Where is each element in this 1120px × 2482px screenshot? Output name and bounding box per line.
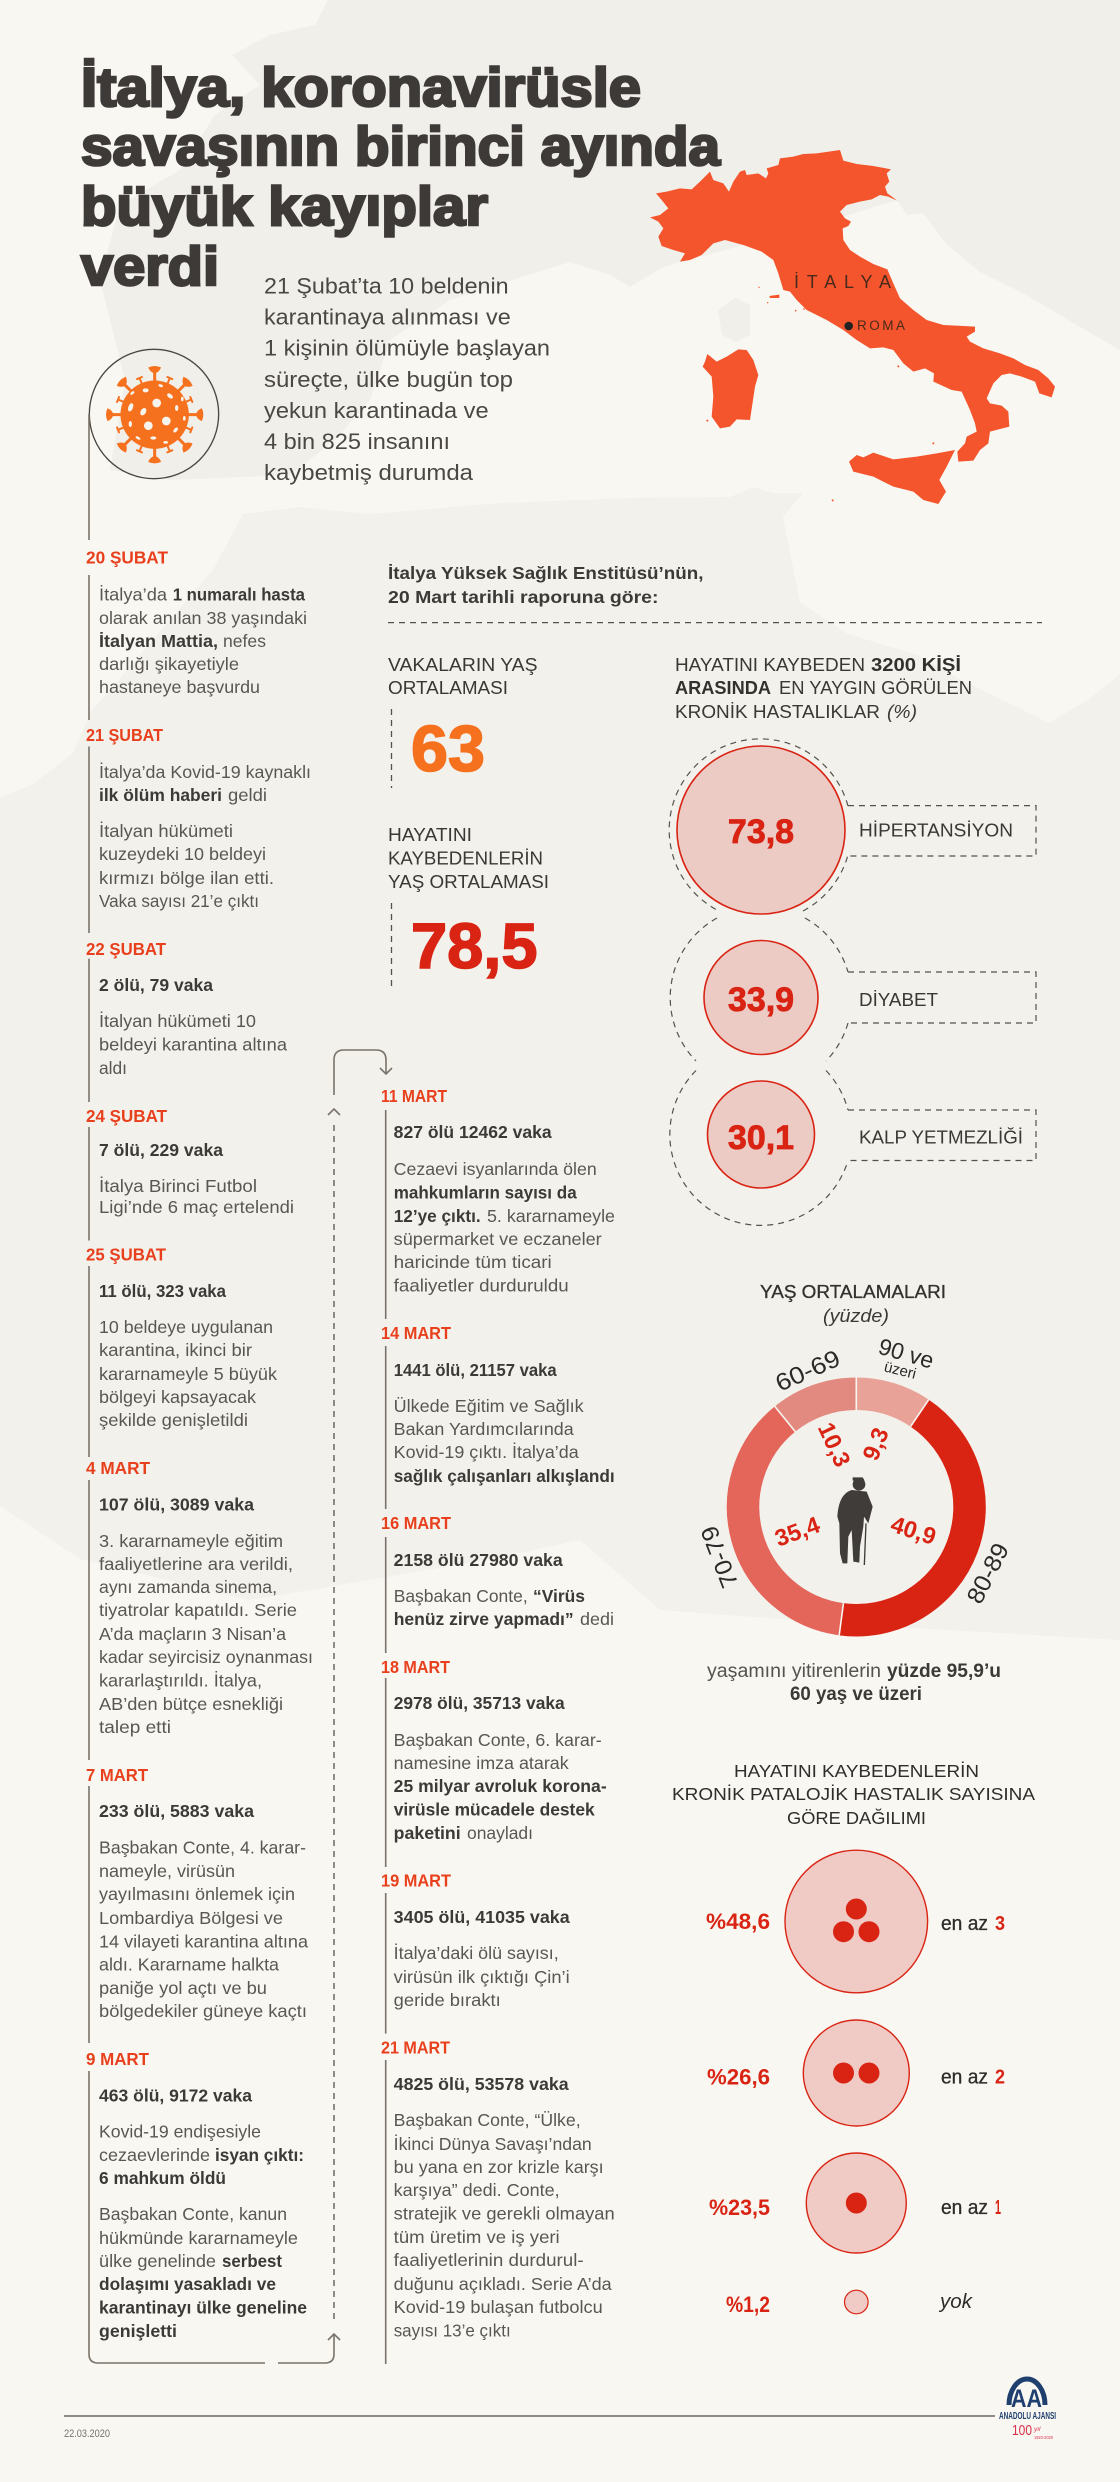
entry: 21 Mart <box>381 2038 615 2364</box>
row: at least 3: en az <box>941 1913 988 1935</box>
stat: death age average: HAYATINI <box>388 825 472 845</box>
donut labels: 40,9 <box>888 1511 939 1550</box>
entry: 9 Mart: genişletti <box>99 2321 177 2341</box>
entry: 25 Şubat: bölgeyi kapsayacak <box>99 1387 256 1407</box>
entry: 14 Mart: Kovid-19 çıktı. İtalya’da <box>394 1442 579 1462</box>
dot: Roma <box>844 322 853 330</box>
entry: 19 Mart: geride bıraktı <box>394 1990 501 2010</box>
entry: 20 Şubat <box>86 548 307 720</box>
entry: 14 Mart: sağlık çalışanları alkışlandı <box>394 1466 615 1486</box>
entry: 20 Şubat: İtalyan Mattia, <box>99 631 218 651</box>
intro text: kaybetmiş durumda <box>264 460 474 485</box>
row: at least 1: %23,5 <box>709 2195 770 2220</box>
intro text: 4 bin 825 insanını <box>264 429 450 454</box>
entry: 11 Mart: haricinde tüm ticari <box>394 1252 552 1272</box>
heading: chronic diseases: ARASINDA <box>675 678 771 698</box>
entry: 19 Mart: 3405 ölü, 41035 vaka <box>394 1907 570 1927</box>
entry: 21 Şubat: 21 ŞUBAT <box>86 725 163 745</box>
row: at least 3: %48,6 <box>706 1909 770 1934</box>
heading: chronic diseases: EN YAYGIN GÖRÜLEN <box>779 678 972 698</box>
row: at least 1 <box>709 2153 1001 2253</box>
entry: 9 Mart <box>86 2049 334 2363</box>
entry: 9 Mart: cezaevlerinde <box>99 2145 210 2165</box>
row: at least 1: 1 <box>995 2197 1001 2219</box>
heading: age averages: (yüzde) <box>823 1306 889 1326</box>
entry: 9 Mart: karantinayı ülke geneline <box>99 2298 307 2318</box>
footer rule <box>64 2415 995 2417</box>
row: at least 3 <box>706 1850 1005 1993</box>
stat: case age average: 63 <box>411 712 485 785</box>
heading: age averages: YAŞ ORTALAMALARI <box>760 1282 946 1302</box>
stat: death age average: KAYBEDENLERİN <box>388 848 543 868</box>
row: none: %1,2 <box>726 2292 770 2317</box>
date: 22.03.2020 <box>64 2428 110 2440</box>
entry: 14 Mart: Bakan Yardımcılarında <box>394 1419 574 1439</box>
bubble: diyabet <box>704 940 938 1054</box>
entry: 9 Mart: serbest <box>222 2251 282 2271</box>
entry: 19 Mart <box>381 1871 570 2034</box>
entry: 9 Mart: ülke genelinde <box>99 2251 216 2271</box>
entry: 9 Mart: hükmünde kararnameyle <box>99 2228 298 2248</box>
entry: 7 Mart: 7 MART <box>86 1765 148 1785</box>
entry: 4 Mart: aynı zamanda sinema, <box>99 1577 277 1597</box>
entry: 20 Şubat: 20 ŞUBAT <box>86 548 168 568</box>
bubble: hipertansiyon <box>677 746 1013 914</box>
entry: 21 Mart: duğunu açıkladı. Serie A’da <box>394 2274 612 2294</box>
heading: chronic diseases: HAYATINI KAYBEDEN <box>675 655 865 675</box>
entry: 25 Şubat: şekilde genişletildi <box>99 1410 248 1430</box>
entry: 11 Mart: Cezaevi isyanlarında ölen <box>394 1159 597 1179</box>
stat: death age average: YAŞ ORTALAMASI <box>388 872 549 892</box>
entry: 11 Mart: 11 MART <box>381 1086 447 1106</box>
entry: 24 Şubat: Ligi’nde 6 maç ertelendi <box>99 1197 294 1217</box>
entry: 9 Mart: dolaşımı yasakladı ve <box>99 2274 276 2294</box>
row: at least 2 <box>707 2020 1005 2126</box>
entry: 22 Şubat: beldeyi karantina altına <box>99 1034 287 1054</box>
donut labels: 90 ve <box>876 1333 937 1374</box>
entry: 21 Şubat: İtalyan hükümeti <box>99 821 233 841</box>
logo: Anadolu Ajansı: AA <box>1011 2385 1042 2413</box>
entry: 7 Mart: 14 vilayeti karantina altına <box>99 1932 308 1952</box>
entry: 4 Mart: 3. kararnameyle eğitim <box>99 1531 283 1551</box>
entry: 21 Şubat: İtalya’da Kovid-19 kaynaklı <box>99 762 311 782</box>
heading: chronic diseases: 3200 KİŞİ <box>871 655 961 675</box>
entry: 24 Şubat: İtalya Birinci Futbol <box>99 1176 257 1196</box>
donut labels <box>696 1333 1015 1608</box>
entry: 18 Mart: 25 milyar avroluk korona- <box>394 1776 607 1796</box>
icon: coronavirus in circle <box>89 349 219 479</box>
intro text: yekun karantinada ve <box>264 398 489 423</box>
bubble: kalp yetmezliği: 30,1 <box>728 1119 794 1157</box>
entry: 18 Mart: Başbakan Conte, 6. karar- <box>394 1730 602 1750</box>
heading: chronic pathology <box>672 1761 1035 1828</box>
entry: 20 Şubat: nefes <box>223 631 266 651</box>
entry: 16 Mart: 2158 ölü 27980 vaka <box>394 1550 563 1570</box>
map: Italy <box>650 150 1055 504</box>
entry: 22 Şubat <box>86 939 287 1102</box>
entry: 14 Mart <box>381 1323 615 1509</box>
bubble: diyabet: DİYABET <box>859 990 938 1010</box>
entry: 7 Mart: yayılmasını önlemek için <box>99 1884 295 1904</box>
entry: 9 Mart: 463 ölü, 9172 vaka <box>99 2086 252 2106</box>
entry: 4 Mart: faaliyetlerine ara verildi, <box>99 1554 293 1574</box>
entry: 21 Şubat <box>86 725 311 933</box>
intro text: 21 Şubat’ta 10 beldenin <box>264 274 509 299</box>
title: İtalya, koronavirüsle <box>81 56 641 118</box>
entry: 21 Mart: bu yana en zor krizle karşı <box>394 2157 604 2177</box>
entry: 7 Mart: 233 ölü, 5883 vaka <box>99 1801 254 1821</box>
entry: 19 Mart: İtalya’daki ölü sayısı, <box>394 1943 559 1963</box>
intro text: süreçte, ülke bugün top <box>264 367 513 392</box>
bubble: diyabet: 33,9 <box>728 981 794 1019</box>
entry: 16 Mart: dedi <box>580 1609 614 1629</box>
entry: 21 Şubat: kuzeydeki 10 beldeyi <box>99 844 266 864</box>
heading: chronic pathology: KRONİK PATALOJİK HASTALIK SAYISINA <box>672 1784 1035 1804</box>
heading: chronic pathology: GÖRE DAĞILIMI <box>787 1807 926 1828</box>
entry: 4 Mart: 107 ölü, 3089 vaka <box>99 1495 254 1515</box>
entry: 21 Mart: faaliyetlerinin durdurul- <box>394 2250 584 2270</box>
title: büyük kayıplar <box>81 175 488 237</box>
label: İtalya: İTALYA <box>794 272 891 292</box>
heading: chronic pathology: HAYATINI KAYBEDENLERİN <box>734 1761 979 1781</box>
entry: 20 Şubat: hastaneye başvurdu <box>99 677 260 697</box>
entry: 21 Mart: İkinci Dünya Savaşı’ndan <box>394 2134 592 2154</box>
donut labels: 35,4 <box>771 1511 823 1552</box>
entry: 18 Mart: virüsle mücadele destek <box>394 1800 595 1820</box>
panel: chronic diseases <box>669 655 1036 1225</box>
entry: 11 Mart: süpermarket ve eczaneler <box>394 1229 602 1249</box>
bubble: kalp yetmezliği <box>708 1081 1023 1188</box>
entry: 9 Mart: 9 MART <box>86 2049 149 2069</box>
heading: chronic diseases: (%) <box>887 702 917 722</box>
heading: chronic diseases <box>675 655 972 722</box>
entry: 25 Şubat: kararnameyle 5 büyük <box>99 1364 277 1384</box>
row: at least 2: %26,6 <box>707 2064 770 2090</box>
entry: 22 Şubat: 2 ölü, 79 vaka <box>99 975 213 995</box>
stat: case age average <box>388 655 538 788</box>
donut labels: 70-79 <box>696 1522 744 1591</box>
entry: 7 Mart: paniğe yol açtı ve bu <box>99 1978 267 1998</box>
heading: chronic diseases: KRONİK HASTALIKLAR <box>675 702 880 722</box>
entry: 20 Şubat: 1 numaralı hasta <box>173 584 305 604</box>
entry: 21 Şubat: geldi <box>228 785 267 805</box>
entry: 24 Şubat: 24 ŞUBAT <box>86 1106 167 1126</box>
entry: 24 Şubat: 7 ölü, 229 vaka <box>99 1140 223 1160</box>
donut labels: 80-89 <box>962 1539 1015 1608</box>
entry: 21 Mart: sayısı 13’e çıktı <box>394 2320 511 2340</box>
entry: 21 Mart: Başbakan Conte, “Ülke, <box>394 2110 581 2130</box>
entry: 4 Mart: talep etti <box>99 1717 171 1737</box>
entry: 4 Mart: kadar seyircisiz oynanması <box>99 1647 313 1667</box>
entry: 16 Mart: Başbakan Conte, <box>394 1586 528 1606</box>
donut labels: üzeri <box>882 1358 918 1383</box>
entry: 4 Mart: 4 MART <box>86 1458 150 1478</box>
entry: 18 Mart: onayladı <box>467 1823 533 1843</box>
entry: 20 Şubat: darlığı şikayetiyle <box>99 654 239 674</box>
donut labels: 10,3 <box>813 1418 856 1471</box>
entry: 16 Mart: “Virüs <box>533 1586 585 1606</box>
entry: 25 Şubat: karantina, ikinci bir <box>99 1340 252 1360</box>
entry: 21 Mart: Kovid-19 bulaşan futbolcu <box>394 2297 603 2317</box>
donut caption <box>707 1661 1001 1705</box>
panel: timeline column 2 <box>381 1086 615 2364</box>
entry: 7 Mart <box>86 1765 308 2043</box>
logo: Anadolu Ajansı <box>999 2379 1056 2440</box>
entry: 25 Şubat: 25 ŞUBAT <box>86 1245 166 1265</box>
entry: 19 Mart: virüsün ilk çıktığı Çin’i <box>394 1967 570 1987</box>
intro text: 1 kişinin ölümüyle başlayan <box>264 336 550 361</box>
entry: 21 Şubat: ilk ölüm haberi <box>99 785 222 805</box>
entry: 4 Mart: A’da maçların 3 Nisan’a <box>99 1624 286 1644</box>
title: verdi <box>81 235 219 297</box>
donut chart <box>743 1377 970 1635</box>
row: at least 2: en az <box>941 2067 988 2089</box>
donut caption: yaşamını yitirenlerin <box>707 1661 881 1682</box>
entry: 21 Mart: karşıya” dedi. Conte, <box>394 2180 560 2200</box>
entry: 25 Şubat: 10 beldeye uygulanan <box>99 1317 273 1337</box>
entry: 4 Mart: kararlaştırıldı. İtalya, <box>99 1670 262 1690</box>
row: none: yok <box>938 2291 973 2313</box>
entry: 22 Şubat: aldı <box>99 1058 127 1078</box>
entry: 7 Mart: bölgedekiler güneye kaçtı <box>99 2001 307 2021</box>
stat: death age average <box>388 825 549 990</box>
entry: 11 Mart: mahkumların sayısı da <box>394 1182 577 1202</box>
stat: case age average: ORTALAMASI <box>388 678 508 698</box>
heading: age averages <box>760 1282 946 1326</box>
entry: 21 Mart: 4825 ölü, 53578 vaka <box>394 2074 569 2094</box>
logo: Anadolu Ajansı: 1920-2020 <box>1034 2435 1053 2440</box>
entry: 7 Mart: aldı. Kararname halkta <box>99 1954 279 1974</box>
panel: age distribution <box>696 1282 1015 1705</box>
logo: Anadolu Ajansı: yıl <box>1033 2426 1041 2433</box>
entry: 11 Mart: 827 ölü 12462 vaka <box>394 1122 552 1142</box>
row: at least 2: 2 <box>995 2067 1005 2089</box>
arrow: column connector <box>328 1050 392 2340</box>
logo: Anadolu Ajansı: 100 <box>1012 2422 1032 2439</box>
entry: 14 Mart: 14 MART <box>381 1323 451 1343</box>
entry: 18 Mart: 18 MART <box>381 1657 450 1677</box>
entry: 16 Mart: henüz zirve yapmadı” <box>394 1609 574 1629</box>
entry: 24 Şubat <box>86 1106 294 1240</box>
donut labels: 60-69 <box>771 1345 845 1397</box>
row: at least 1: en az <box>941 2197 988 2219</box>
entry: 21 Mart: 21 MART <box>381 2038 450 2058</box>
entry: 9 Mart: Başbakan Conte, kanun <box>99 2204 287 2224</box>
entry: 25 Şubat <box>86 1245 277 1457</box>
entry: 11 Mart: faaliyetler durduruldu <box>394 1276 569 1296</box>
entry: 21 Şubat: Vaka sayısı 21’e çıktı <box>99 891 259 911</box>
donut labels: 9,3 <box>857 1424 894 1464</box>
entry: 21 Mart: stratejik ve gerekli olmayan <box>394 2204 615 2224</box>
title <box>81 56 720 297</box>
entry: 18 Mart: paketini <box>394 1823 461 1843</box>
entry: 18 Mart: namesine imza atarak <box>394 1753 569 1773</box>
title: savaşının birinci ayında <box>81 115 720 177</box>
row: at least 3: 3 <box>995 1913 1005 1935</box>
entry: 11 Mart <box>381 1086 615 1319</box>
icon: elderly person with cane <box>837 1477 873 1565</box>
donut caption: 60 yaş ve üzeri <box>790 1684 922 1705</box>
timeline connector from icon <box>88 414 90 540</box>
bubble: hipertansiyon: HİPERTANSİYON <box>859 820 1013 840</box>
entry: 18 Mart: 2978 ölü, 35713 vaka <box>394 1693 565 1713</box>
entry: 7 Mart: Başbakan Conte, 4. karar- <box>99 1838 306 1858</box>
heading: report source: 20 Mart tarihli raporuna göre: <box>388 587 658 607</box>
intro text: karantinaya alınması ve <box>264 305 511 330</box>
entry: 4 Mart: AB’den bütçe esnekliği <box>99 1694 283 1714</box>
label: Roma: ROMA <box>857 318 905 333</box>
dashed connector outline <box>669 739 1036 1225</box>
heading: report source <box>388 563 1042 623</box>
intro text <box>264 274 550 485</box>
bubble: hipertansiyon: 73,8 <box>728 813 794 851</box>
logo: Anadolu Ajansı: ANADOLU AJANSI <box>999 2410 1056 2422</box>
heading: report source: İtalya Yüksek Sağlık Enstitüsü’nün, <box>388 563 704 583</box>
entry: 22 Şubat: 22 ŞUBAT <box>86 939 166 959</box>
panel: chronic pathology count <box>672 1761 1035 2317</box>
bubble: kalp yetmezliği: KALP YETMEZLİĞİ <box>859 1127 1023 1148</box>
entry: 7 Mart: Lombardiya Bölgesi ve <box>99 1908 283 1928</box>
entry: 16 Mart: 16 MART <box>381 1513 451 1533</box>
entry: 11 Mart: 12’ye çıktı. <box>394 1206 481 1226</box>
donut caption: yüzde 95,9’u <box>887 1661 1001 1682</box>
panel: timeline column 1 <box>86 414 334 2363</box>
entry: 14 Mart: 1441 ölü, 21157 vaka <box>394 1360 557 1380</box>
entry: 21 Şubat: kırmızı bölge ilan etti. <box>99 868 274 888</box>
entry: 20 Şubat: İtalya’da <box>99 584 167 604</box>
stat: case age average: VAKALARIN YAŞ <box>388 655 538 675</box>
entry: 11 Mart: 5. kararnameyle <box>487 1206 615 1226</box>
entry: 7 Mart: nameyle, virüsün <box>99 1861 235 1881</box>
entry: 16 Mart <box>381 1513 614 1653</box>
entry: 25 Şubat: 11 ölü, 323 vaka <box>99 1281 226 1301</box>
stat: death age average: 78,5 <box>411 910 538 982</box>
entry: 4 Mart <box>86 1458 313 1760</box>
entry: 9 Mart: 6 mahkum öldü <box>99 2168 226 2188</box>
entry: 14 Mart: Ülkede Eğitim ve Sağlık <box>394 1396 584 1416</box>
entry: 9 Mart: isyan çıktı: <box>215 2145 304 2165</box>
entry: 18 Mart <box>381 1657 607 1867</box>
row: none <box>726 2290 973 2317</box>
entry: 21 Mart: tüm üretim ve iş yeri <box>394 2227 560 2247</box>
entry: 9 Mart: Kovid-19 endişesiyle <box>99 2122 261 2142</box>
entry: 22 Şubat: İtalyan hükümeti 10 <box>99 1011 256 1031</box>
entry: 20 Şubat: olarak anılan 38 yaşındaki <box>99 608 307 628</box>
entry: 19 Mart: 19 MART <box>381 1871 451 1891</box>
entry: 4 Mart: tiyatrolar kapatıldı. Serie <box>99 1600 297 1620</box>
